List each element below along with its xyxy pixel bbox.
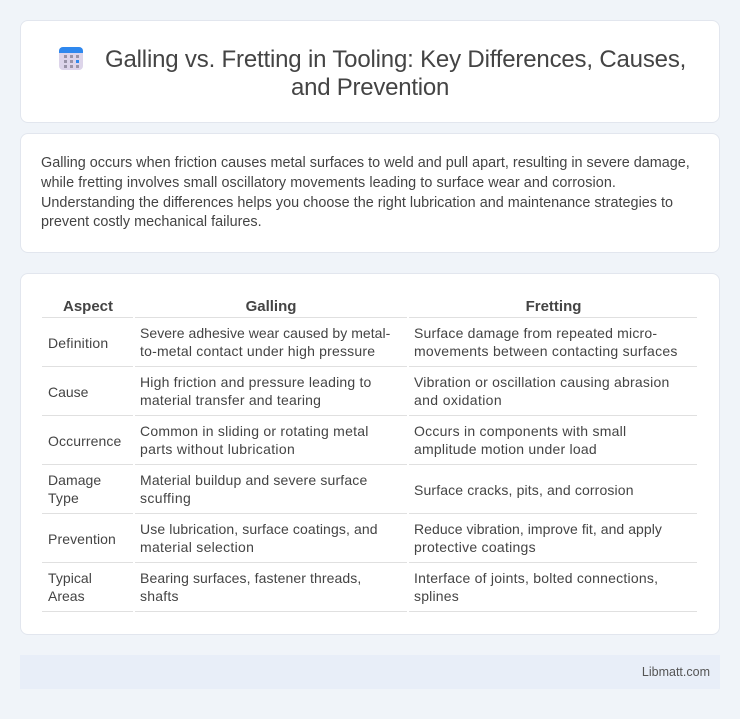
row: prevention: Use lubrication, surface coatings, and <box>140 521 378 537</box>
row: prevention <box>48 521 662 555</box>
row: occurrence: amplitude motion under load <box>414 441 597 457</box>
table header <box>63 298 581 315</box>
row: damage type <box>48 472 634 506</box>
icon: calendar <box>59 47 83 70</box>
row: cause <box>48 374 669 408</box>
row: damage type: Type <box>48 490 79 506</box>
table card <box>20 273 720 635</box>
intro text: Galling occurs when friction causes metal surfaces to weld and pull apart, resulting in severe damage, <box>41 155 690 171</box>
title: and Prevention <box>291 74 449 101</box>
footer <box>20 655 720 689</box>
row: cause: and oxidation <box>414 392 502 408</box>
footer text: Libmatt.com <box>642 665 710 679</box>
row: typical areas: Areas <box>48 588 85 604</box>
row: definition <box>48 325 678 359</box>
row: definition: Surface damage from repeated micro- <box>414 325 657 341</box>
row: occurrence: Occurrence <box>48 433 121 449</box>
row: definition: Severe adhesive wear caused by metal- <box>140 325 390 341</box>
row: cause: material transfer and tearing <box>140 392 321 408</box>
intro text: Understanding the differences helps you choose the right lubrication and maintenance strategies to <box>41 195 673 211</box>
row: definition: to-metal contact under high pressure <box>140 343 375 359</box>
intro text <box>41 155 690 230</box>
row: damage type: Surface cracks, pits, and corrosion <box>414 482 634 498</box>
row: cause: Cause <box>48 384 88 400</box>
table header: Galling <box>246 298 296 315</box>
intro text: while fretting involves small oscillatory movements leading to surface wear and corrosion. <box>41 175 616 191</box>
row: damage type: Material buildup and severe surface <box>140 472 367 488</box>
row: typical areas: shafts <box>140 588 179 604</box>
table header: Aspect <box>63 298 113 315</box>
title card <box>20 20 720 123</box>
row: prevention: Prevention <box>48 531 116 547</box>
row: typical areas <box>48 570 658 604</box>
row: cause: Vibration or oscillation causing abrasion <box>414 374 669 390</box>
table header: Fretting <box>526 298 581 315</box>
title: Galling vs. Fretting in Tooling: Key Differences, Causes, <box>105 46 686 73</box>
row: typical areas: Typical <box>48 570 92 586</box>
title <box>105 46 686 101</box>
row: definition: movements between contacting surfaces <box>414 343 678 359</box>
row: damage type: Damage <box>48 472 101 488</box>
intro text: prevent costly mechanical failures. <box>41 214 262 230</box>
row: damage type: scuffing <box>140 490 191 506</box>
intro card <box>20 133 720 253</box>
row: definition: Definition <box>48 335 108 351</box>
row: prevention: Reduce vibration, improve fit, and apply <box>414 521 662 537</box>
row: typical areas: Bearing surfaces, fastener threads, <box>140 570 361 586</box>
row: occurrence: Occurs in components with small <box>414 423 626 439</box>
row: occurrence: parts without lubrication <box>140 441 295 457</box>
row: prevention: protective coatings <box>414 539 536 555</box>
row: typical areas: splines <box>414 588 459 604</box>
comparison table <box>42 298 697 612</box>
row: occurrence <box>48 423 626 457</box>
row: occurrence: Common in sliding or rotating metal <box>140 423 369 439</box>
row: cause: High friction and pressure leading to <box>140 374 372 390</box>
row: prevention: material selection <box>140 539 254 555</box>
row: typical areas: Interface of joints, bolted connections, <box>414 570 658 586</box>
